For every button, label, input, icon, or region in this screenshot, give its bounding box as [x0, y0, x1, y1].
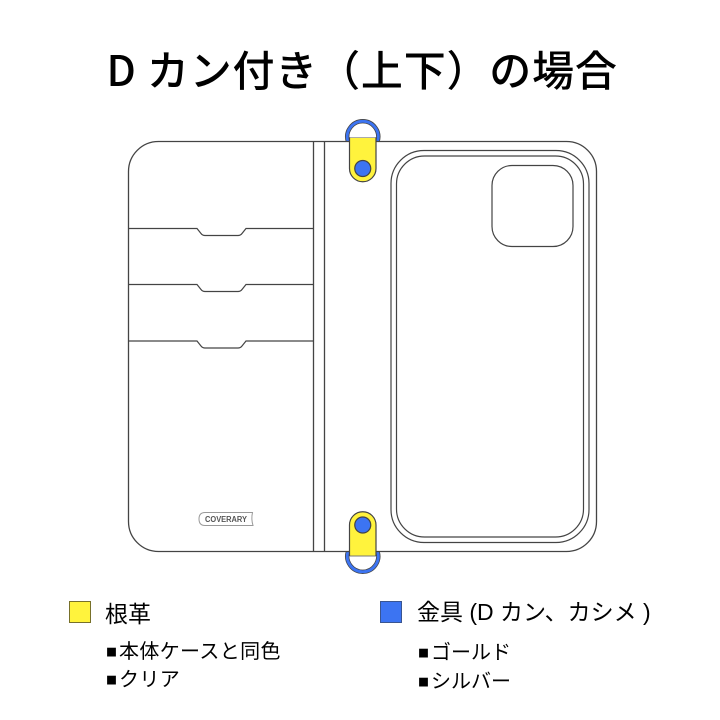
legend items: metal parts: ゴールド [431, 636, 511, 665]
logo tag: COVERARY [205, 515, 248, 524]
phone shell outer [391, 150, 589, 542]
case outline [128, 142, 596, 552]
legend items: leather: 本体ケースと同色 [119, 635, 281, 664]
legend swatch: blue [380, 601, 402, 623]
title: D カン付き（上下）の場合 [106, 38, 618, 99]
legend swatch: yellow [69, 601, 91, 623]
logo tag [199, 512, 253, 526]
D-ring bottom [347, 552, 378, 572]
legend items: metal parts: ■ [418, 674, 429, 690]
card slot 3 [128, 341, 314, 348]
legend items: metal parts: ■ [418, 645, 429, 661]
camera cutout [492, 166, 573, 246]
legend items: metal parts: シルバー [431, 665, 511, 694]
card slot 2 [128, 284, 314, 292]
legend heading: metal parts: 金具 (D カン、カシメ ) [417, 599, 651, 625]
legend heading: leather: 根革 [105, 595, 151, 629]
card slot 1 [128, 228, 314, 236]
legend items: metal parts [418, 636, 511, 694]
spine lines [314, 142, 324, 552]
top tab [350, 138, 376, 182]
legend items: leather: ■ [106, 644, 117, 660]
legend items: leather [106, 635, 281, 692]
legend items: leather: クリア [119, 663, 180, 692]
D-ring top [347, 121, 378, 142]
legend items: leather: ■ [106, 672, 117, 688]
bottom tab [350, 512, 376, 556]
phone shell inner [396, 156, 584, 537]
